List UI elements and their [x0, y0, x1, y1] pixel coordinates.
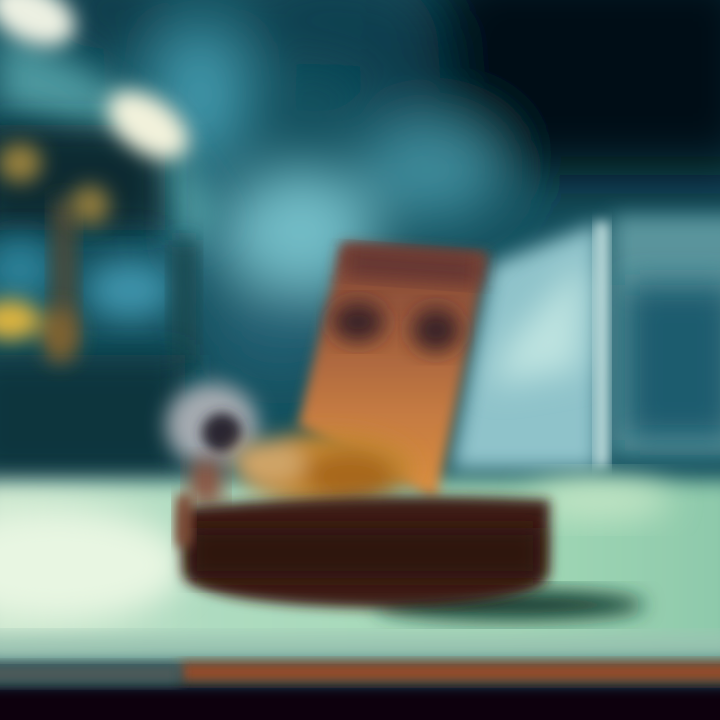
food: golden mound: [232, 432, 413, 504]
table edge and base: [0, 662, 720, 720]
eyeball ornament: [166, 383, 258, 505]
lights: gold dots: [0, 143, 110, 363]
table surface: [0, 480, 720, 657]
highlight: white light patches: [0, 0, 201, 174]
shadow: bowl shadow: [375, 590, 645, 620]
card: brown tilted card: [298, 242, 488, 500]
bowl: dark brown dish: [176, 494, 550, 608]
background: dark structure on left: [0, 35, 225, 480]
glass panel: [450, 215, 720, 470]
